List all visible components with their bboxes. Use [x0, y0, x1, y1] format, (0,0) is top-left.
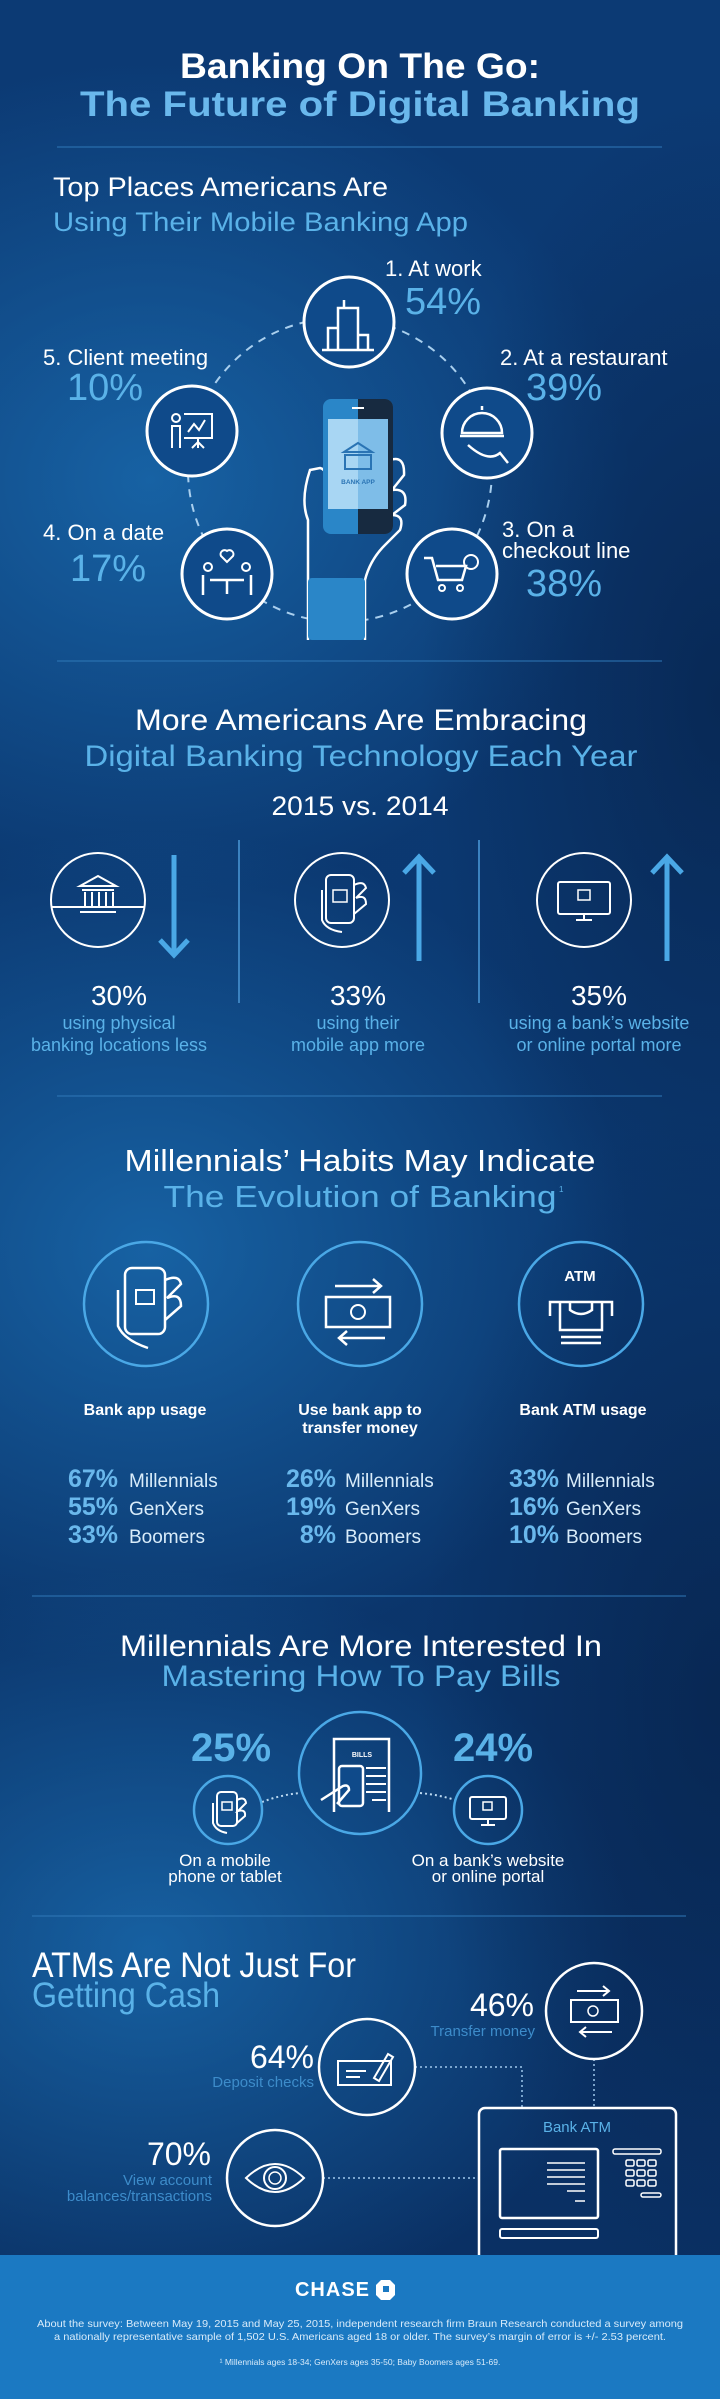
- stat: website bills: or online portal: [432, 1867, 544, 1886]
- column: bank app usage: Bank app usage: [84, 1402, 206, 1419]
- place 2: restaurant: 39%: [526, 367, 602, 409]
- diagram: mobile usage places: [43, 256, 668, 640]
- column: transfer money: [286, 1242, 434, 1549]
- stat: website bills: 24%: [453, 1726, 533, 1770]
- column: ATM usage: 16%: [509, 1493, 559, 1521]
- heading: top places: [53, 172, 468, 237]
- stat: mobile app: 33%: [330, 980, 386, 1011]
- heading: ATMs: ATMs Are Not Just For: [32, 1946, 356, 1985]
- place 2: restaurant: [442, 345, 668, 478]
- stat: view balances 70%: [67, 2130, 323, 2226]
- place 3: checkout line: [407, 517, 630, 619]
- stat: physical locations: banking locations less: [31, 1035, 207, 1055]
- heading: millennials habits: 1: [559, 1185, 564, 1194]
- stat: mobile bills: [168, 1726, 282, 1886]
- stat: mobile bills: 25%: [191, 1726, 271, 1770]
- place 5: client meeting: 5. Client meeting: [43, 345, 208, 370]
- heading: millennials habits: Millennials’ Habits May Indicate: [124, 1143, 596, 1178]
- title: The Future of Digital Banking: [80, 85, 640, 124]
- stat: deposit checks 64%: 64%: [250, 2039, 314, 2075]
- stat: deposit checks 64%: Deposit checks: [212, 2074, 314, 2091]
- heading: pay bills: [120, 1630, 602, 1693]
- stat: website bills: [412, 1726, 564, 1886]
- survey note: ¹ Millennials ages 18-34; GenXers ages 35-50; Baby Boomers ages 51-69.: [220, 2357, 500, 2367]
- stat: mobile app: mobile app more: [291, 1035, 425, 1055]
- heading: pay bills: Mastering How To Pay Bills: [162, 1660, 560, 1693]
- heading: embracing digital banking: [84, 704, 638, 821]
- heading: embracing digital banking: More Americans Are Embracing: [135, 704, 587, 737]
- stat: transfer money 46%: Transfer money: [431, 2023, 535, 2040]
- logo: chase: CHASE: [295, 2279, 370, 2301]
- stat: website bills: On a bank’s website: [412, 1851, 564, 1870]
- stat: physical locations: using physical: [62, 1013, 176, 1033]
- column: transfer money: 8%: [300, 1521, 336, 1549]
- column: bank app usage: [68, 1242, 218, 1549]
- diagram: bills: [168, 1712, 564, 1886]
- stat: view balances 70%: 70%: [147, 2136, 211, 2172]
- column: bank app usage: Boomers: [129, 1527, 205, 1548]
- stat: mobile bills: On a mobile: [179, 1851, 271, 1870]
- stat: website: [509, 853, 689, 1055]
- stat: transfer money 46%: 46%: [470, 1987, 534, 2023]
- survey note: About the survey: Between May 19, 2015 and May 25, 2015, independent research firm Braun Research conducted a survey among: [37, 2318, 683, 2330]
- survey note: a nationally representative sample of 1,502 U.S. Americans aged 18 or older. The survey’s margin of error is +/- 2.53 percent.: [54, 2331, 666, 2343]
- heading: millennials habits: [124, 1143, 596, 1214]
- column: ATM usage: [509, 1242, 655, 1549]
- icon: bank ATM: [479, 2108, 676, 2255]
- title: [80, 47, 640, 124]
- heading: millennials habits: The Evolution of Banking: [164, 1179, 556, 1214]
- column: transfer money: 19%: [286, 1493, 336, 1521]
- stat: mobile bills: phone or tablet: [168, 1867, 282, 1886]
- column: ATM usage: Boomers: [566, 1527, 642, 1548]
- icon: bills: BILLS: [352, 1752, 372, 1759]
- heading: ATMs: [32, 1946, 356, 2015]
- stat: view balances 70%: View account: [123, 2172, 213, 2189]
- column: transfer money: 26%: [286, 1465, 336, 1493]
- place 4: on a date: 17%: [70, 548, 146, 590]
- column: bank app usage: 55%: [68, 1493, 118, 1521]
- stat: physical locations: 30%: [91, 980, 147, 1011]
- survey note: [37, 2318, 683, 2367]
- column: bank app usage: 67%: [68, 1465, 118, 1493]
- stat: physical locations: [31, 853, 207, 1055]
- stat: transfer money 46%: [431, 1963, 642, 2059]
- icon: phone in hand: BANK APP: [341, 479, 376, 486]
- column: bank app usage: 33%: [68, 1521, 118, 1549]
- stat: website: using a bank’s website: [509, 1013, 689, 1033]
- place 1: at work: 1. At work: [385, 256, 483, 281]
- place 4: on a date: 4. On a date: [43, 520, 164, 545]
- column: ATM usage: GenXers: [566, 1499, 641, 1520]
- place 1: at work: [304, 256, 483, 367]
- icon: bank ATM: Bank ATM: [543, 2119, 611, 2136]
- footer: [0, 2255, 720, 2399]
- place 2: restaurant: 2. At a restaurant: [500, 345, 668, 370]
- icon: phone in hand: [304, 399, 405, 640]
- column: transfer money: Millennials: [345, 1471, 434, 1492]
- column: transfer money: Use bank app to: [298, 1402, 422, 1419]
- place 3: checkout line: 38%: [526, 563, 602, 605]
- column: transfer money: transfer money: [302, 1420, 418, 1437]
- icon: bills: [299, 1712, 421, 1834]
- heading: ATMs: Getting Cash: [32, 1976, 220, 2015]
- column: transfer money: Boomers: [345, 1527, 421, 1548]
- stat: website: 35%: [571, 980, 627, 1011]
- stat: view balances 70%: balances/transactions: [67, 2188, 212, 2205]
- column: ATM usage: Millennials: [566, 1471, 655, 1492]
- stat: website: or online portal more: [516, 1035, 682, 1055]
- place 1: at work: 54%: [405, 281, 481, 323]
- connectors: [323, 2059, 594, 2178]
- heading: top places: Top Places Americans Are: [53, 172, 388, 202]
- stat: mobile app: [291, 853, 434, 1055]
- heading: embracing digital banking: Digital Banking Technology Each Year: [84, 740, 638, 773]
- column: ATM usage: 10%: [509, 1521, 559, 1549]
- heading: embracing digital banking: 2015 vs. 2014: [272, 791, 448, 821]
- title: Banking On The Go:: [180, 47, 540, 86]
- place 4: on a date: [43, 520, 272, 619]
- place 5: client meeting: 10%: [67, 367, 143, 409]
- column: ATM usage: Bank ATM usage: [519, 1402, 647, 1419]
- place 3: checkout line: checkout line: [502, 538, 630, 563]
- place 5: client meeting: [43, 345, 237, 476]
- stat: deposit checks 64%: [212, 2019, 415, 2115]
- column: ATM usage: 33%: [509, 1465, 559, 1493]
- stat: mobile app: using their: [316, 1013, 400, 1033]
- column: bank app usage: Millennials: [129, 1471, 218, 1492]
- column: ATM usage: ATM: [564, 1268, 596, 1285]
- column: bank app usage: GenXers: [129, 1499, 204, 1520]
- place 3: checkout line: 3. On a: [502, 517, 575, 542]
- heading: top places: Using Their Mobile Banking App: [53, 207, 468, 237]
- column: transfer money: GenXers: [345, 1499, 420, 1520]
- heading: pay bills: Millennials Are More Interested In: [120, 1630, 602, 1663]
